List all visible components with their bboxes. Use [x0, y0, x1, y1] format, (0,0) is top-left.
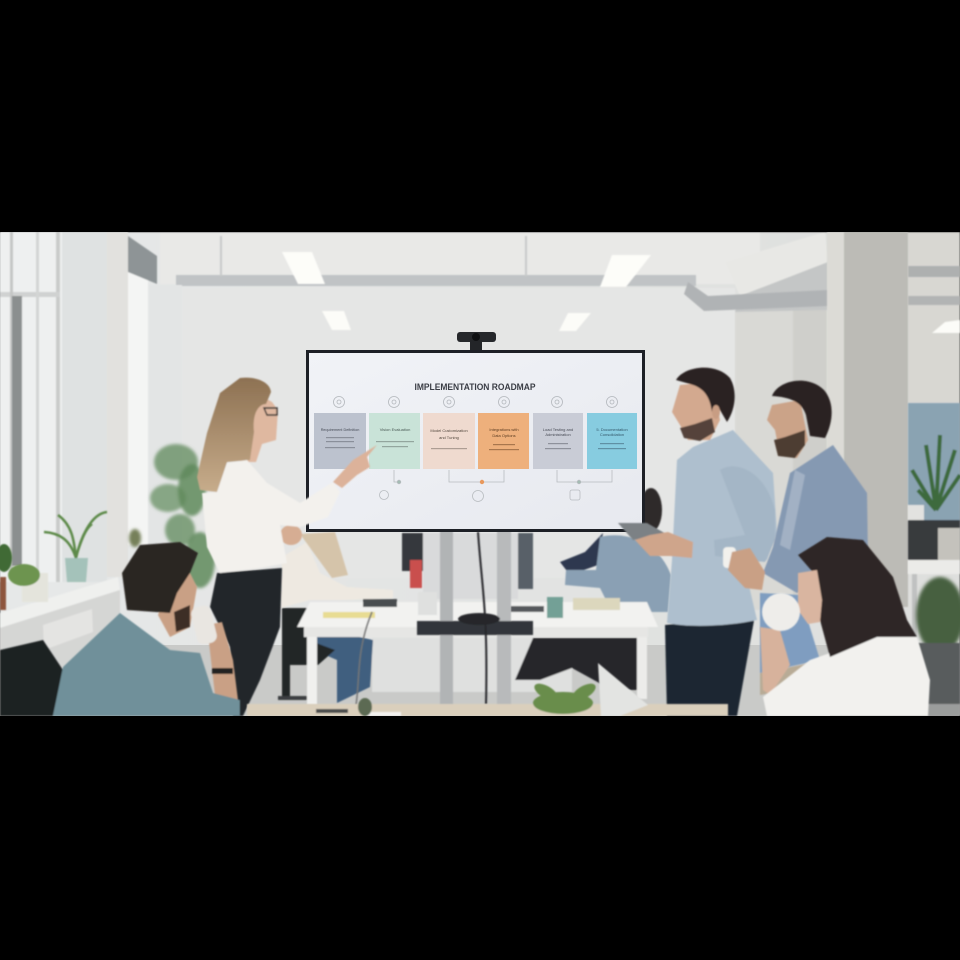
webcam [457, 332, 496, 350]
chair [0, 640, 63, 716]
roadmap card 2 [369, 413, 420, 469]
roadmap card 5: Load Testing and [543, 427, 573, 432]
man 1 hands [635, 532, 693, 558]
man 2 beard [774, 430, 805, 458]
cup [190, 604, 218, 646]
presenter legs [210, 568, 282, 716]
roadmap card 5: Administration [545, 432, 571, 437]
man with tablet, standing [618, 368, 777, 716]
roadmap card 4: Data Options [492, 433, 516, 438]
presenter face [247, 399, 278, 463]
woman hair [798, 537, 917, 657]
step icons [334, 396, 618, 408]
back left tall plant [129, 444, 215, 588]
watch [212, 668, 233, 674]
phone and papers [316, 709, 348, 713]
roadmap card 3: Model Customization [430, 428, 468, 433]
arm [207, 622, 238, 700]
display stand [356, 530, 533, 705]
man 1 hair [676, 368, 735, 422]
desk tops [297, 602, 658, 627]
concrete pillar [827, 232, 908, 607]
man 2 face [767, 400, 808, 458]
display screen [306, 350, 645, 532]
man 1 beard [680, 418, 715, 441]
presenter arm and hand [333, 445, 377, 488]
roadmap card 3 [423, 413, 475, 469]
plants on window sill [0, 512, 107, 610]
foreground table [247, 663, 728, 716]
roadmap card 1: Requirement Definition [321, 428, 359, 432]
roadmap card 1 [314, 413, 366, 469]
hair [122, 542, 198, 613]
laptop [598, 663, 648, 716]
man 1 trousers [665, 615, 755, 716]
right wall art and plants [908, 403, 960, 716]
presenter second hand [280, 525, 302, 545]
roadmap card 3: and Tuning [439, 435, 459, 440]
desk clutter [323, 612, 375, 618]
man 2 lower shirt [760, 593, 820, 673]
roadmap card 4: Integrations with [489, 427, 519, 432]
presenter hair [197, 378, 271, 492]
floor [120, 645, 830, 716]
screen surface [309, 353, 642, 529]
office photo scene [0, 232, 960, 716]
ceiling duct [176, 236, 960, 311]
roadmap card 6: 5. Documentation [596, 427, 628, 432]
man 2 shirt [763, 445, 868, 593]
face and beard [158, 570, 197, 637]
screen title: IMPLEMENTATION ROADMAP [414, 382, 536, 392]
shirt [53, 613, 240, 716]
woman with mug, foreground right [760, 537, 930, 716]
man 1 shirt [667, 430, 777, 626]
table plant [532, 680, 598, 714]
screen bezel [306, 350, 645, 532]
woman face [798, 570, 822, 624]
woman blouse [763, 635, 930, 716]
back wall and ceiling [0, 232, 960, 716]
man with coffee, standing right [723, 381, 868, 695]
presenter, woman pointing [197, 378, 377, 716]
roadmap card 4 [478, 413, 529, 469]
roadmap card 6 [587, 413, 637, 469]
back office area with colleagues and desks [278, 488, 671, 705]
ceiling lights [282, 252, 960, 333]
roadmap card 6: Consolidation [600, 432, 624, 437]
man 1 face [672, 382, 720, 440]
seated colleague, left [278, 532, 393, 703]
foreground left man [0, 542, 240, 716]
man 1 tablet [618, 523, 668, 540]
man 2 hand and cup [723, 547, 765, 590]
connector lines and lower icons [380, 470, 612, 502]
seated colleagues, right [515, 488, 671, 690]
presenter blouse [201, 459, 309, 574]
windows, left wall [0, 232, 182, 716]
man 1 ear [712, 405, 720, 419]
presenter glasses [264, 408, 277, 415]
roadmap card 2: Vision Evaluation [380, 427, 410, 432]
woman mug [762, 593, 800, 631]
woman arm [760, 627, 790, 695]
roadmap card 5 [533, 413, 583, 469]
man 2 hair [772, 381, 832, 438]
man 2 trousers [760, 662, 817, 695]
